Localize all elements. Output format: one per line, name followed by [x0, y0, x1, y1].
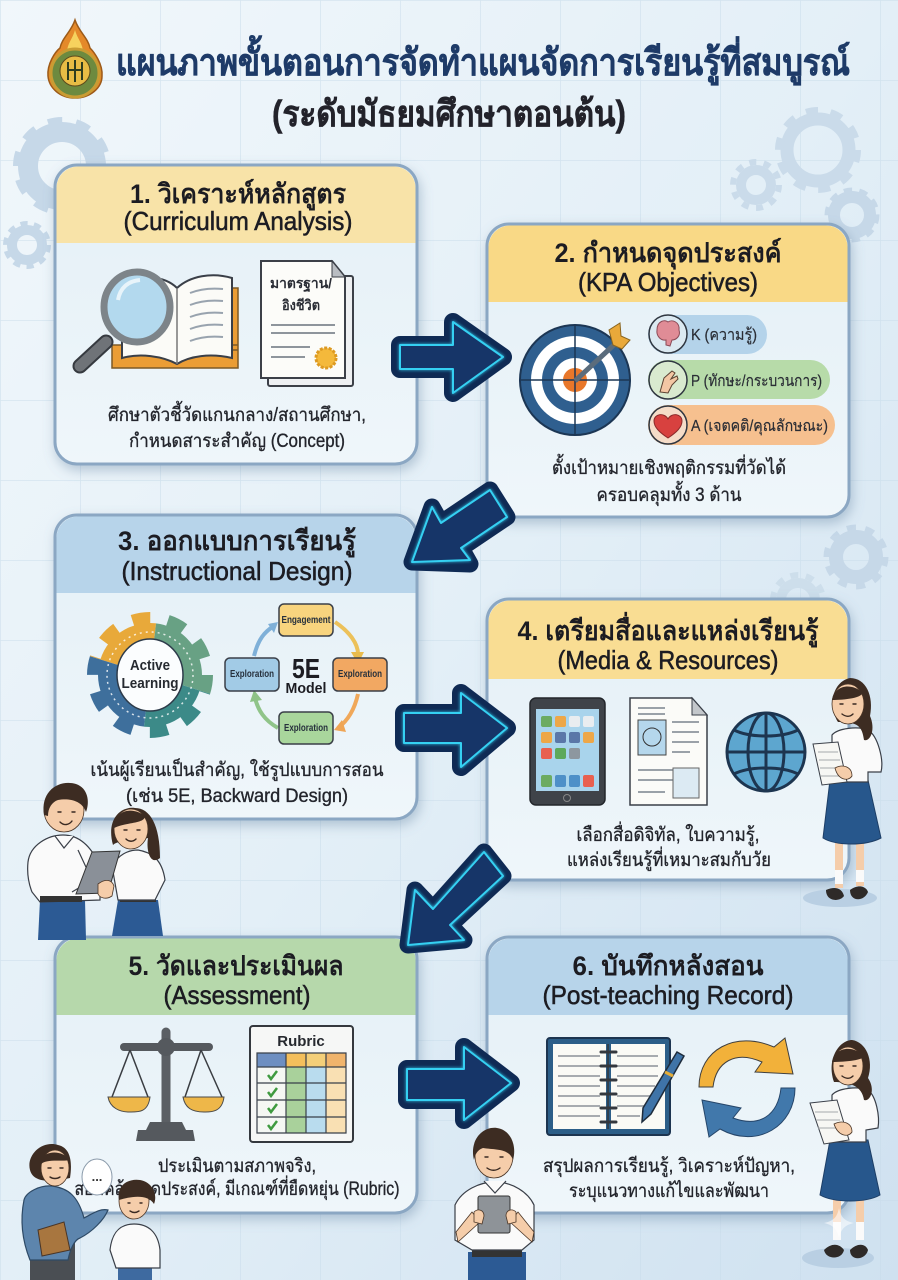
- tablet held by students: [76, 851, 120, 894]
- panel 4 subheading: (Media & Resources): [558, 645, 778, 675]
- panel 3 text: (เช่น 5E, Backward Design): [126, 786, 348, 807]
- arrow: step 5 to 6: [407, 1047, 511, 1120]
- panel 6: post-teaching record: [487, 937, 849, 1213]
- panel 4: media and resources: [487, 599, 849, 880]
- step: engagement: Engagement: [282, 615, 331, 626]
- panel 2 heading: 2. กำหนดจุดประสงค์: [554, 237, 782, 270]
- step: exploration left: Exploration: [230, 669, 274, 680]
- character: girl reading paper, panel 4: [803, 678, 882, 907]
- sparkle watermark: [824, 1208, 854, 1238]
- panel 5 heading: 5. วัดและประเมินผล: [128, 951, 344, 981]
- 5E label: 5E: [292, 653, 320, 684]
- panel 5 text: สอดคล้องจุดประสงค์, มีเกณฑ์ที่ยืดหยุ่น (Rubric): [74, 1175, 400, 1201]
- 5E label: Model: [286, 680, 326, 697]
- icon: standards document: อิงชีวิต: [281, 297, 320, 313]
- pill: skills: P (ทักษะ/กระบวนการ): [691, 373, 822, 390]
- panel 6 header: [488, 938, 848, 1015]
- icon: standards document: [261, 261, 353, 386]
- step: exploration bottom: Exploration: [284, 723, 328, 734]
- title: [116, 35, 850, 134]
- arrow: step 4 to 5: [408, 852, 503, 945]
- icon: target with arrow: [520, 323, 630, 435]
- icon: globe: [727, 713, 805, 791]
- panel 3 text: เน้นผู้เรียนเป็นสำคัญ, ใช้รูปแบบการสอน: [90, 757, 384, 781]
- panel 2 header: [488, 226, 848, 302]
- panel 1 text: กำหนดสาระสำคัญ (Concept): [129, 431, 345, 452]
- panel 5 subheading: (Assessment): [164, 980, 310, 1010]
- boy with teacher: [110, 1180, 160, 1280]
- boy with tablet: [28, 783, 100, 940]
- panel 3: instructional design: [55, 515, 417, 819]
- step: exploration bottom: [279, 712, 333, 744]
- 5E label: [286, 653, 326, 697]
- panel 6 subheading: (Post-teaching Record): [542, 980, 794, 1010]
- character: girl reading paper, panel 6: [802, 1040, 880, 1268]
- icon: balance scale: [108, 1032, 224, 1141]
- icon: active learning gear: [87, 612, 213, 738]
- panel 6 text: สรุปผลการเรียนรู้, วิเคราะห์ปัญหา,: [543, 1155, 795, 1178]
- pill: knowledge: K (ความรู้): [691, 326, 757, 345]
- panel 3 header: [56, 516, 416, 593]
- pill: attitude: A (เจตคติ/คุณลักษณะ): [691, 418, 828, 436]
- panel 1 subheading: (Curriculum Analysis): [124, 206, 352, 236]
- characters: teacher and boy: [22, 1144, 160, 1280]
- icon: book with magnifier: [80, 272, 238, 368]
- panel 2 subheading: (KPA Objectives): [578, 267, 758, 297]
- step: exploration left: [225, 658, 279, 691]
- panel 1 text: ศึกษาตัวชี้วัดแกนกลาง/สถานศึกษา,: [108, 401, 366, 426]
- panel 5: assessment: [55, 937, 417, 1213]
- characters: boy and girl with tablet: [28, 783, 165, 940]
- icon: active learning gear: Active: [130, 657, 170, 674]
- step: engagement: [279, 604, 333, 636]
- panel 6 heading: 6. บันทึกหลังสอน: [572, 951, 764, 981]
- speech bubble: ...: [92, 1169, 102, 1184]
- pill: skills: [648, 360, 830, 399]
- panel 3 subheading: (Instructional Design): [122, 556, 352, 586]
- panel 2 text: ตั้งเป้าหมายเชิงพฤติกรรมที่วัดได้: [552, 454, 786, 479]
- logo emblem: [48, 20, 102, 98]
- icon: rubric table: Rubric: [277, 1033, 325, 1050]
- panel 5 text: [74, 1156, 400, 1201]
- icon: cycle arrows: [699, 1038, 795, 1137]
- diagram: 5E model cycle: [225, 604, 387, 744]
- panel 4 header: [488, 600, 848, 679]
- title: (ระดับมัธยมศึกษาตอนต้น): [272, 93, 626, 134]
- icon: brain: [649, 315, 687, 353]
- panel 1: curriculum analysis: [55, 165, 417, 464]
- icon: notebook with pen: [547, 1038, 684, 1135]
- icon: document: [630, 698, 707, 805]
- panel 4 text: แหล่งเรียนรู้ที่เหมาะสมกับวัย: [567, 846, 771, 871]
- icon: rubric table: [250, 1026, 353, 1142]
- icon: standards document: มาตรฐาน/: [270, 275, 332, 293]
- icon: active learning gear: Learning: [122, 675, 178, 692]
- girl with tablet: [111, 808, 165, 936]
- pill: knowledge: [648, 315, 767, 354]
- panel 6 text: [543, 1155, 795, 1203]
- panel 3 text: [90, 757, 384, 807]
- panel 1 text: [108, 401, 366, 452]
- panel 2 text: ครอบคลุมทั้ง 3 ด้าน: [596, 481, 742, 507]
- panel 5 header: [56, 938, 416, 1015]
- panel 4 text: เลือกสื่อดิจิทัล, ใบความรู้,: [576, 821, 760, 846]
- step: exploration right: [333, 658, 387, 691]
- panel 2: KPA objectives: [487, 224, 849, 517]
- icon: tablet: [530, 698, 605, 805]
- panel 1 header: [56, 166, 416, 243]
- arrow: step 2 to 3: [412, 490, 507, 564]
- character: boy holding tablet: [455, 1128, 534, 1280]
- teacher: [22, 1144, 108, 1280]
- pill: attitude: [648, 405, 835, 445]
- panel 2 text: [552, 454, 786, 507]
- panel 3 heading: 3. ออกแบบการเรียนรู้: [118, 526, 356, 558]
- background gears: [6, 111, 885, 625]
- icon: heart: [649, 406, 687, 444]
- panel 4 heading: 4. เตรียมสื่อและแหล่งเรียนรู้: [518, 611, 819, 648]
- step: exploration right: Exploration: [338, 669, 382, 680]
- panel 6 text: ระบุแนวทางแก้ไขและพัฒนา: [569, 1180, 769, 1203]
- panel 4 text: [567, 821, 771, 871]
- panel 5 text: ประเมินตามสภาพจริง,: [158, 1156, 316, 1177]
- panel 1 heading: 1. วิเคราะห์หลักสูตร: [130, 178, 346, 211]
- icon: hand: [649, 361, 687, 399]
- arrow: step 3 to 4: [404, 693, 507, 767]
- arrow: step 1 to 2: [400, 322, 503, 393]
